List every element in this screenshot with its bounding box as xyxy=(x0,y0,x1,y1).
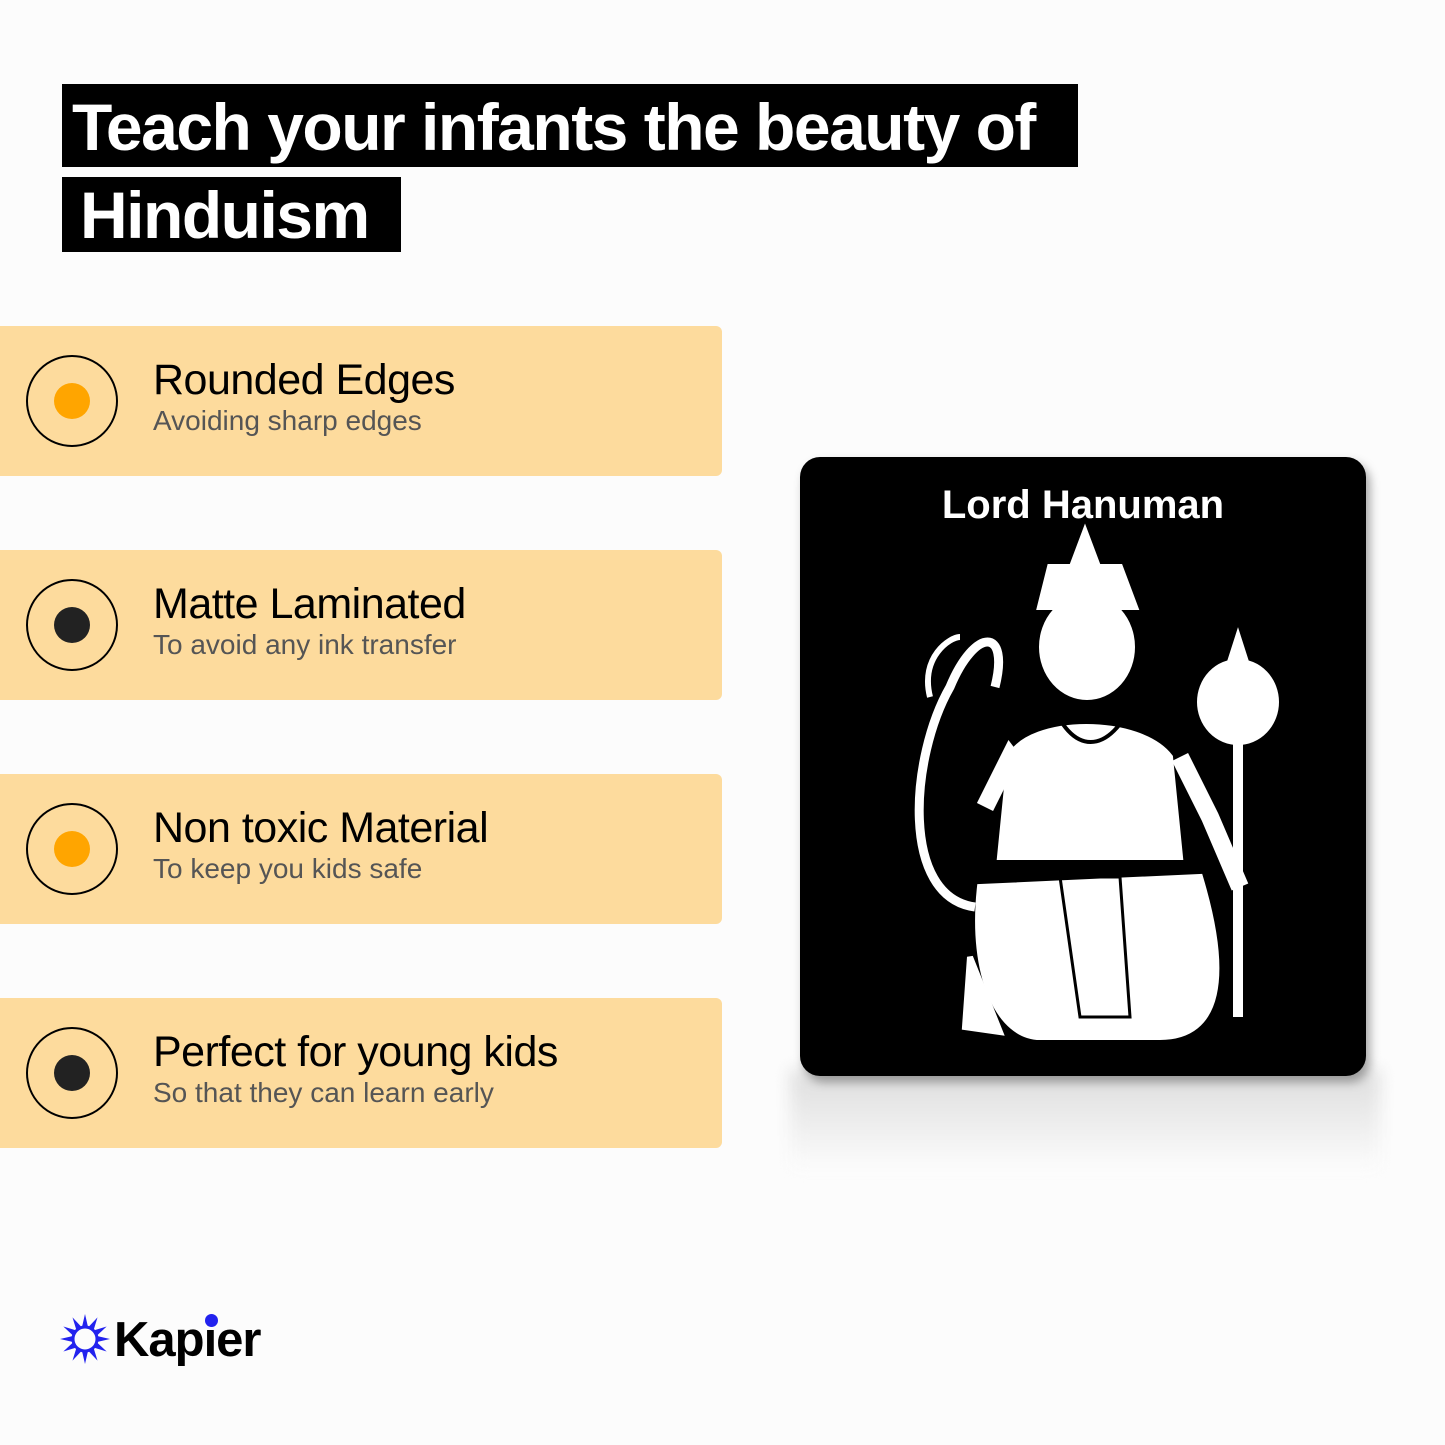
panel: non toxic xyxy=(0,774,722,924)
title line 1: Teach your infants the beauty of xyxy=(72,90,1035,164)
panel: matte laminated: To avoid any ink transfer xyxy=(153,629,456,660)
panel: non toxic: Non toxic Material xyxy=(153,804,488,852)
card title: Lord Hanuman xyxy=(942,483,1224,527)
illustration xyxy=(914,524,1279,1040)
icon: sun xyxy=(60,1314,110,1364)
panel: non toxic: To keep you kids safe xyxy=(153,853,422,884)
panel: young kids: Perfect for young kids xyxy=(153,1028,558,1076)
panel: matte laminated xyxy=(0,550,722,700)
card: Lord Hanuman xyxy=(800,457,1366,1076)
panel: rounded edges: Rounded Edges xyxy=(153,356,455,404)
panel: rounded edges: Avoiding sharp edges xyxy=(153,405,422,436)
card shadow xyxy=(790,1070,1380,1170)
panel: young kids xyxy=(0,998,722,1148)
panel: rounded edges xyxy=(0,326,722,476)
title line 2: Hinduism xyxy=(80,178,369,252)
logo: Kapier: Kapier xyxy=(114,1313,261,1367)
panel: matte laminated: Matte Laminated xyxy=(153,580,466,628)
panel: young kids: So that they can learn early xyxy=(153,1077,494,1108)
